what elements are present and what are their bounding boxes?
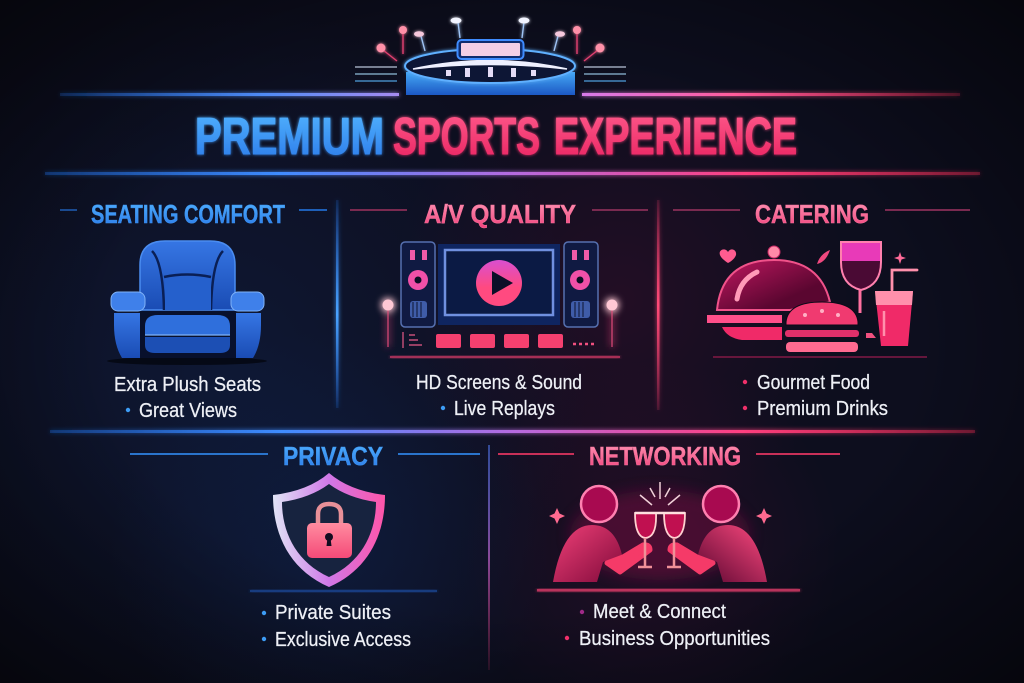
text: A/V features: HD Screens & Sound — [416, 372, 582, 394]
text: catering features: Gourmet Food — [757, 372, 870, 394]
panel: networking — [498, 441, 840, 650]
icon: two people toasting — [549, 482, 772, 582]
text: seating features: Great Views — [139, 400, 237, 422]
heading: networking: NETWORKING — [589, 441, 741, 471]
divider under title — [45, 172, 980, 175]
top divider lines — [60, 93, 960, 96]
divider between rows — [50, 430, 975, 433]
vertical divider: seating and A/V — [336, 200, 338, 408]
text: catering features — [743, 372, 888, 420]
icon: armchair — [107, 241, 267, 365]
icon: food and drinks — [707, 242, 927, 358]
text: A/V features — [416, 372, 582, 420]
text: networking features: Meet & Connect — [593, 601, 726, 623]
text: catering features: Premium Drinks — [757, 398, 888, 420]
title: EXPERIENCE — [554, 108, 797, 166]
icon: left stage light — [382, 300, 394, 347]
title — [195, 108, 797, 166]
icon: stadium floodlights — [376, 18, 604, 61]
icon: right stage light — [606, 300, 618, 347]
heading: seating comfort: SEATING COMFORT — [91, 199, 285, 229]
panel: A/V quality — [350, 199, 648, 420]
vertical divider: A/V and catering — [657, 200, 660, 410]
title: SPORTS — [393, 108, 540, 166]
heading: catering: CATERING — [755, 199, 869, 229]
text: privacy features: Private Suites — [275, 602, 391, 624]
panel: privacy — [130, 441, 480, 651]
icon: A/V system — [401, 242, 598, 327]
text: networking features: Business Opportunities — [579, 628, 770, 650]
text: networking features — [565, 601, 770, 650]
text: seating features — [114, 374, 261, 422]
text: A/V features: Live Replays — [454, 398, 555, 420]
heading: A/V quality: A/V QUALITY — [424, 199, 576, 229]
panel: catering — [673, 199, 970, 420]
vertical divider: privacy and networking — [488, 445, 490, 670]
icon: stadium — [355, 18, 626, 95]
text: seating features: Extra Plush Seats — [114, 374, 261, 396]
title: PREMIUM — [195, 108, 384, 166]
heading: privacy: PRIVACY — [283, 441, 383, 471]
icon: shield with padlock — [273, 473, 385, 587]
control buttons — [390, 332, 620, 358]
panel: seating comfort — [60, 199, 327, 422]
text: privacy features: Exclusive Access — [275, 629, 411, 651]
text: privacy features — [262, 602, 411, 651]
